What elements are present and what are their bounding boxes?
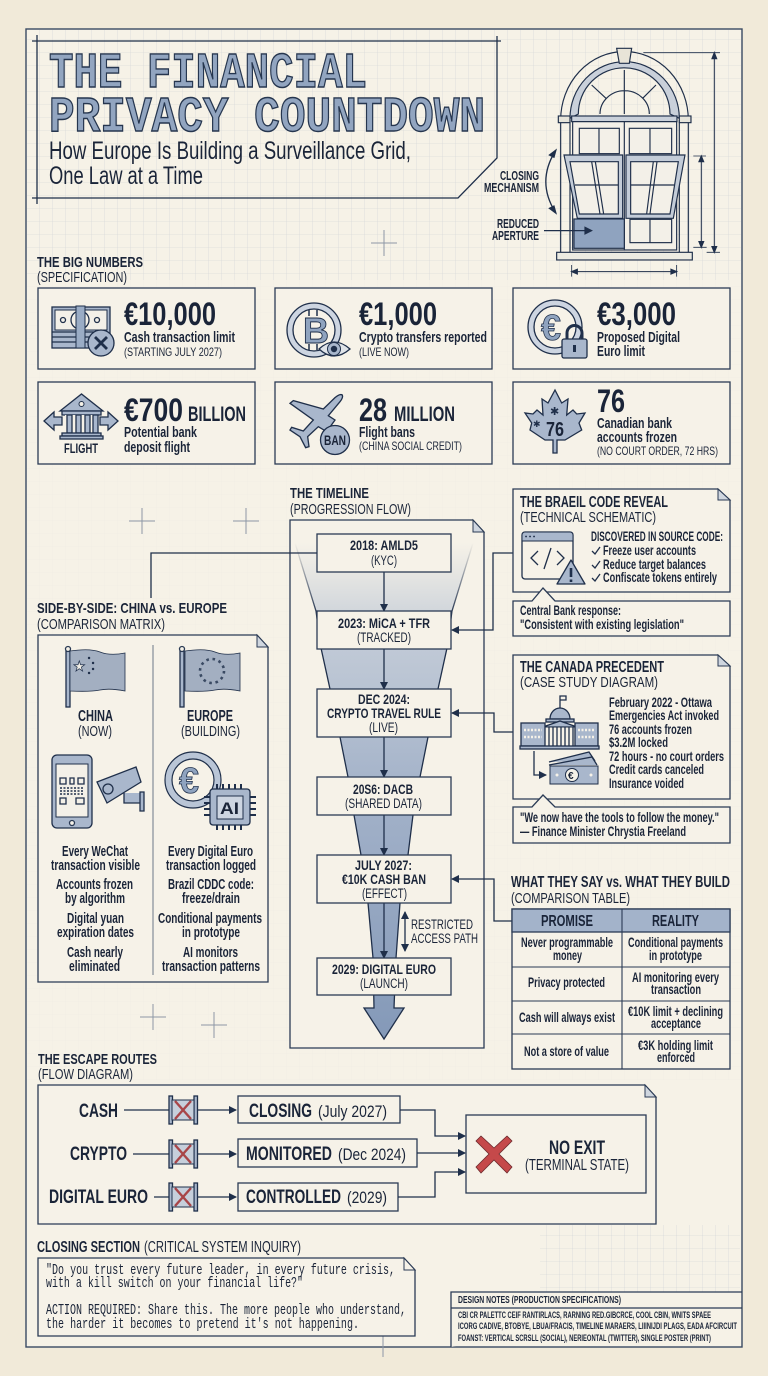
title: THE FINANCIAL [49,46,367,103]
icon: euro coin with lock: € [541,307,561,348]
restricted access path: RESTRICTED [411,916,473,932]
heading: escape routes: (FLOW DIAGRAM) [38,1066,133,1083]
title: PRIVACY COUNTDOWN [49,90,485,147]
timeline step: dec 2024 [317,689,451,737]
timeline step: july 2027: €10K CASH BAN [342,871,426,887]
route: crypto: MONITORED [246,1144,332,1165]
timeline step: dacb: (SHARED DATA) [345,796,422,811]
timeline step: 2018: 2018: AMLD5 [350,537,418,553]
panel: escape routes [38,1085,656,1224]
timeline step: dec 2024: (LIVE) [369,720,398,735]
route: digital euro: DIGITAL EURO [49,1187,148,1208]
stat text [124,296,235,359]
panel: brazil code reveal [513,489,730,592]
stat card: deposit flight [38,382,255,464]
stat card: canadian accounts [513,382,730,464]
icon: parliament and cash: € [568,771,574,782]
timeline step: dacb [317,777,451,815]
list: europe: transaction patterns [162,959,260,975]
comparison table [512,909,730,1069]
title [49,46,485,147]
discovered checklist: Reduce target balances [603,556,706,572]
table rows: Cash will always exist [519,1009,615,1025]
europe column: (BUILDING) [181,723,240,740]
icon: plane with ban weight: BAN [324,432,346,448]
heading: china vs europe [37,600,227,633]
stat text: BILLION [188,403,246,426]
icon: plane with ban weight [290,395,350,454]
panel: closing question: with a kill switch on your financial life?" [46,1276,303,1292]
panel: brazil code reveal: THE BRAEIL CODE REVEAL [520,494,668,511]
heading: what they say [511,874,730,907]
list: china [51,844,140,975]
heading: the big numbers: THE BIG NUMBERS [37,254,143,271]
stat card: crypto transfers [275,288,492,369]
icon: euro and ai chip: AI [220,799,239,818]
icon: code window with warning [522,532,585,584]
list: china: Every WeChat [62,844,128,860]
list: china: Cash nearly [67,945,123,961]
europe column [158,646,262,975]
route: digital euro [49,1183,398,1211]
panel: brazil code reveal: (TECHNICAL SCHEMATIC) [520,509,656,526]
heading: what they say: (COMPARISON TABLE) [511,890,630,907]
table rows: Not a store of value [524,1043,609,1059]
subtitle: One Law at a Time [49,162,203,190]
funnel arrow [295,543,473,1039]
heading: china vs europe: (COMPARISON MATRIX) [37,616,165,633]
list: china: Digital yuan [67,911,124,927]
icon: bitcoin with eye: B [303,310,329,351]
subtitle [49,137,411,190]
canada facts: 76 accounts frozen [609,721,692,737]
table rows: enforced [657,1049,695,1065]
route: crypto [70,1139,417,1168]
stat card: digital euro limit [513,288,730,369]
panel: canada precedent: (CASE STUDY DIAGRAM) [520,674,658,691]
stat text: 28 [359,392,387,428]
stat text: €3,000 [597,296,676,332]
callout: central bank response [513,588,730,636]
restricted access path: ACCESS PATH [411,930,478,946]
window diagram: MECHANISM [484,180,539,195]
canada facts: February 2022 - Ottawa [609,694,712,710]
icon: maple leaf: 76 [546,419,564,441]
stat text: (NO COURT ORDER, 72 HRS) [597,444,718,458]
list: china: by algorithm [65,891,125,907]
panel: closing question: "Do you trust every future leader, in every future crisis, [46,1263,395,1279]
icon: parliament and cash [520,696,599,784]
route: crypto: CRYPTO [70,1144,127,1165]
timeline step: 2018 [317,534,451,572]
route: cash: CASH [79,1101,118,1122]
list: europe: in prototype [182,925,240,941]
route connectors [398,1110,465,1197]
table rows: transaction [651,981,701,997]
canada facts: Insurance voided [609,775,684,791]
list: china: Accounts frozen [56,877,133,893]
panel: china vs europe [38,635,268,982]
china column [51,646,144,975]
heading: closing section: (CRITICAL SYSTEM INQUIRY) [144,1239,301,1256]
stat text [597,383,718,458]
callout: central bank response: Central Bank response: [520,603,621,618]
icon: maple leaf: ✱ [533,420,541,430]
stat text: (STARTING JULY 2027) [124,345,222,359]
route: digital euro: (2029) [347,1188,387,1207]
list: europe: Conditional payments [158,911,262,927]
table rows: Privacy protected [528,974,605,990]
window diagram: REDUCED [497,216,539,231]
panel: timeline [290,520,484,1048]
stat text: Potential bank [124,424,197,441]
stat text: €10,000 [124,296,216,332]
timeline step: july 2027 [317,855,451,903]
list: europe: transaction logged [166,858,256,874]
heading: the timeline [290,485,411,518]
panel: canada precedent: THE CANADA PRECEDENT [520,659,664,676]
callout: freeland quote [513,795,730,843]
timeline step: 2029 [317,958,451,995]
list: europe: Brazil CDDC code: [168,877,254,893]
stat text [124,392,246,456]
discovered checklist: Freeze user accounts [603,542,696,558]
icon: bank with arrows [44,394,118,456]
stat text [359,296,487,359]
stat text: Euro limit [597,343,645,360]
timeline step: july 2027: JULY 2027: [355,857,412,873]
timeline step: 2023 [317,611,451,649]
list: china: transaction visible [51,858,140,874]
heading: the timeline: (PROGRESSION FLOW) [290,501,411,518]
panel: closing question: ACTION REQUIRED: Share this. The more people who understand, [46,1303,406,1319]
stat card: flight bans [275,382,492,464]
route: crypto: (Dec 2024) [338,1145,406,1164]
stat text: deposit flight [124,439,190,456]
stat text: Proposed Digital [597,329,680,346]
canada facts [609,694,724,791]
icon: euro coin with lock [528,300,587,358]
icon: maple leaf [525,390,585,453]
window diagram: APERTURE [492,228,539,243]
table rows: €10K limit + declining [628,1003,723,1019]
heading: the timeline: THE TIMELINE [290,485,369,502]
stat text: (LIVE NOW) [359,345,409,359]
table rows: in prototype [649,947,702,963]
stat text: accounts frozen [597,429,677,446]
timeline step: dec 2024: DEC 2024: [358,691,410,707]
table header: REALITY [652,913,699,930]
stat text: €1,000 [359,296,437,332]
timeline step: july 2027: (EFFECT) [362,886,407,901]
list: europe [158,844,262,975]
heading: the big numbers [37,254,143,286]
heading: closing section [37,1239,301,1256]
stat text [597,296,680,360]
route: cash: (July 2027) [318,1102,387,1121]
china column: CHINA [78,708,113,725]
panel: canada precedent [513,655,730,799]
timeline step: 2023: 2023: MiCA + TFR [338,615,430,631]
stat text: Flight bans [359,424,415,441]
canada facts: $3.2M locked [609,734,668,750]
icon: euro and ai chip: € [179,760,199,801]
icon: bitcoin with eye [287,303,350,357]
table header [541,913,699,930]
flag: china [66,646,125,707]
europe column: EUROPE [187,708,233,725]
timeline step: 2029: (LAUNCH) [360,976,408,991]
heading: the big numbers: (SPECIFICATION) [37,269,127,286]
connector lines [151,553,513,921]
icon: phone and camera [52,755,144,828]
route: cash: CLOSING [249,1101,312,1122]
icon: maple leaf: ✱ [550,405,559,418]
canada facts: Credit cards canceled [609,761,704,777]
stat card: cash limit [38,288,255,369]
callout: central bank response: "Consistent with existing legislation" [520,617,684,632]
stat text: Cash transaction limit [124,329,235,346]
list: europe: Every Digital Euro [168,844,253,860]
stat text [359,392,462,453]
table rows: money [553,947,582,963]
table rows: acceptance [651,1015,701,1031]
heading: escape routes: THE ESCAPE ROUTES [38,1051,157,1068]
stat text: 76 [597,383,625,419]
window diagram [484,48,720,277]
restricted access path [405,912,478,951]
table header: PROMISE [541,913,593,930]
icon: bank with arrows: FLIGHT [64,440,98,456]
icon: euro and ai chip [165,752,256,830]
panel: closing question: the harder it becomes to pretend it's not happening. [46,1317,359,1333]
stat text: (CHINA SOCIAL CREDIT) [359,439,462,453]
icon: red x [476,1136,512,1173]
table rows: €3K holding limit [638,1037,713,1053]
china column: (NOW) [78,723,112,740]
timeline step: 2023: (TRACKED) [357,630,411,645]
route: cash [79,1096,400,1124]
discovered checklist [591,529,723,585]
stat text: Canadian bank [597,415,672,432]
route: digital euro: CONTROLLED [246,1187,341,1208]
table rows [519,934,723,1065]
panel: closing question [38,1258,415,1336]
flag: europe [180,646,240,707]
heading: escape routes [38,1051,157,1083]
subtitle: How Europe Is Building a Surveillance Grid, [49,137,411,165]
design notes [451,1292,742,1347]
list: china: eliminated [69,959,120,975]
stat text: MILLION [394,403,455,426]
table rows: AI monitoring every [632,969,719,985]
no exit box: (TERMINAL STATE) [525,1157,629,1174]
no exit box: NO EXIT [549,1138,605,1159]
callout: freeland quote: — Finance Minister Chrystia Freeland [520,824,686,839]
heading: closing section: CLOSING SECTION [37,1239,140,1256]
title block [32,35,501,204]
heading: china vs europe: SIDE-BY-SIDE: CHINA vs. EUROPE [37,600,227,617]
no exit box [466,1115,646,1193]
timeline step: dacb: 20S6: DACB [353,781,413,797]
icon: cash with x [52,306,114,356]
timeline step: 2029: 2029: DIGITAL EURO [332,961,436,977]
table rows: Never programmable [521,934,613,950]
stat text: €700 [124,392,183,428]
stat text: Crypto transfers reported [359,329,487,346]
list: europe: AI monitors [183,945,238,961]
list: europe: freeze/drain [182,891,240,907]
timeline step: dec 2024: CRYPTO TRAVEL RULE [327,705,441,721]
design notes: DESIGN NOTES (PRODUCTION SPECIFICATIONS) [458,1295,621,1306]
list: china: expiration dates [57,925,134,941]
timeline step: 2018: (KYC) [371,553,397,568]
flag: china: ★ [73,659,86,675]
window diagram: CLOSING [500,168,539,183]
